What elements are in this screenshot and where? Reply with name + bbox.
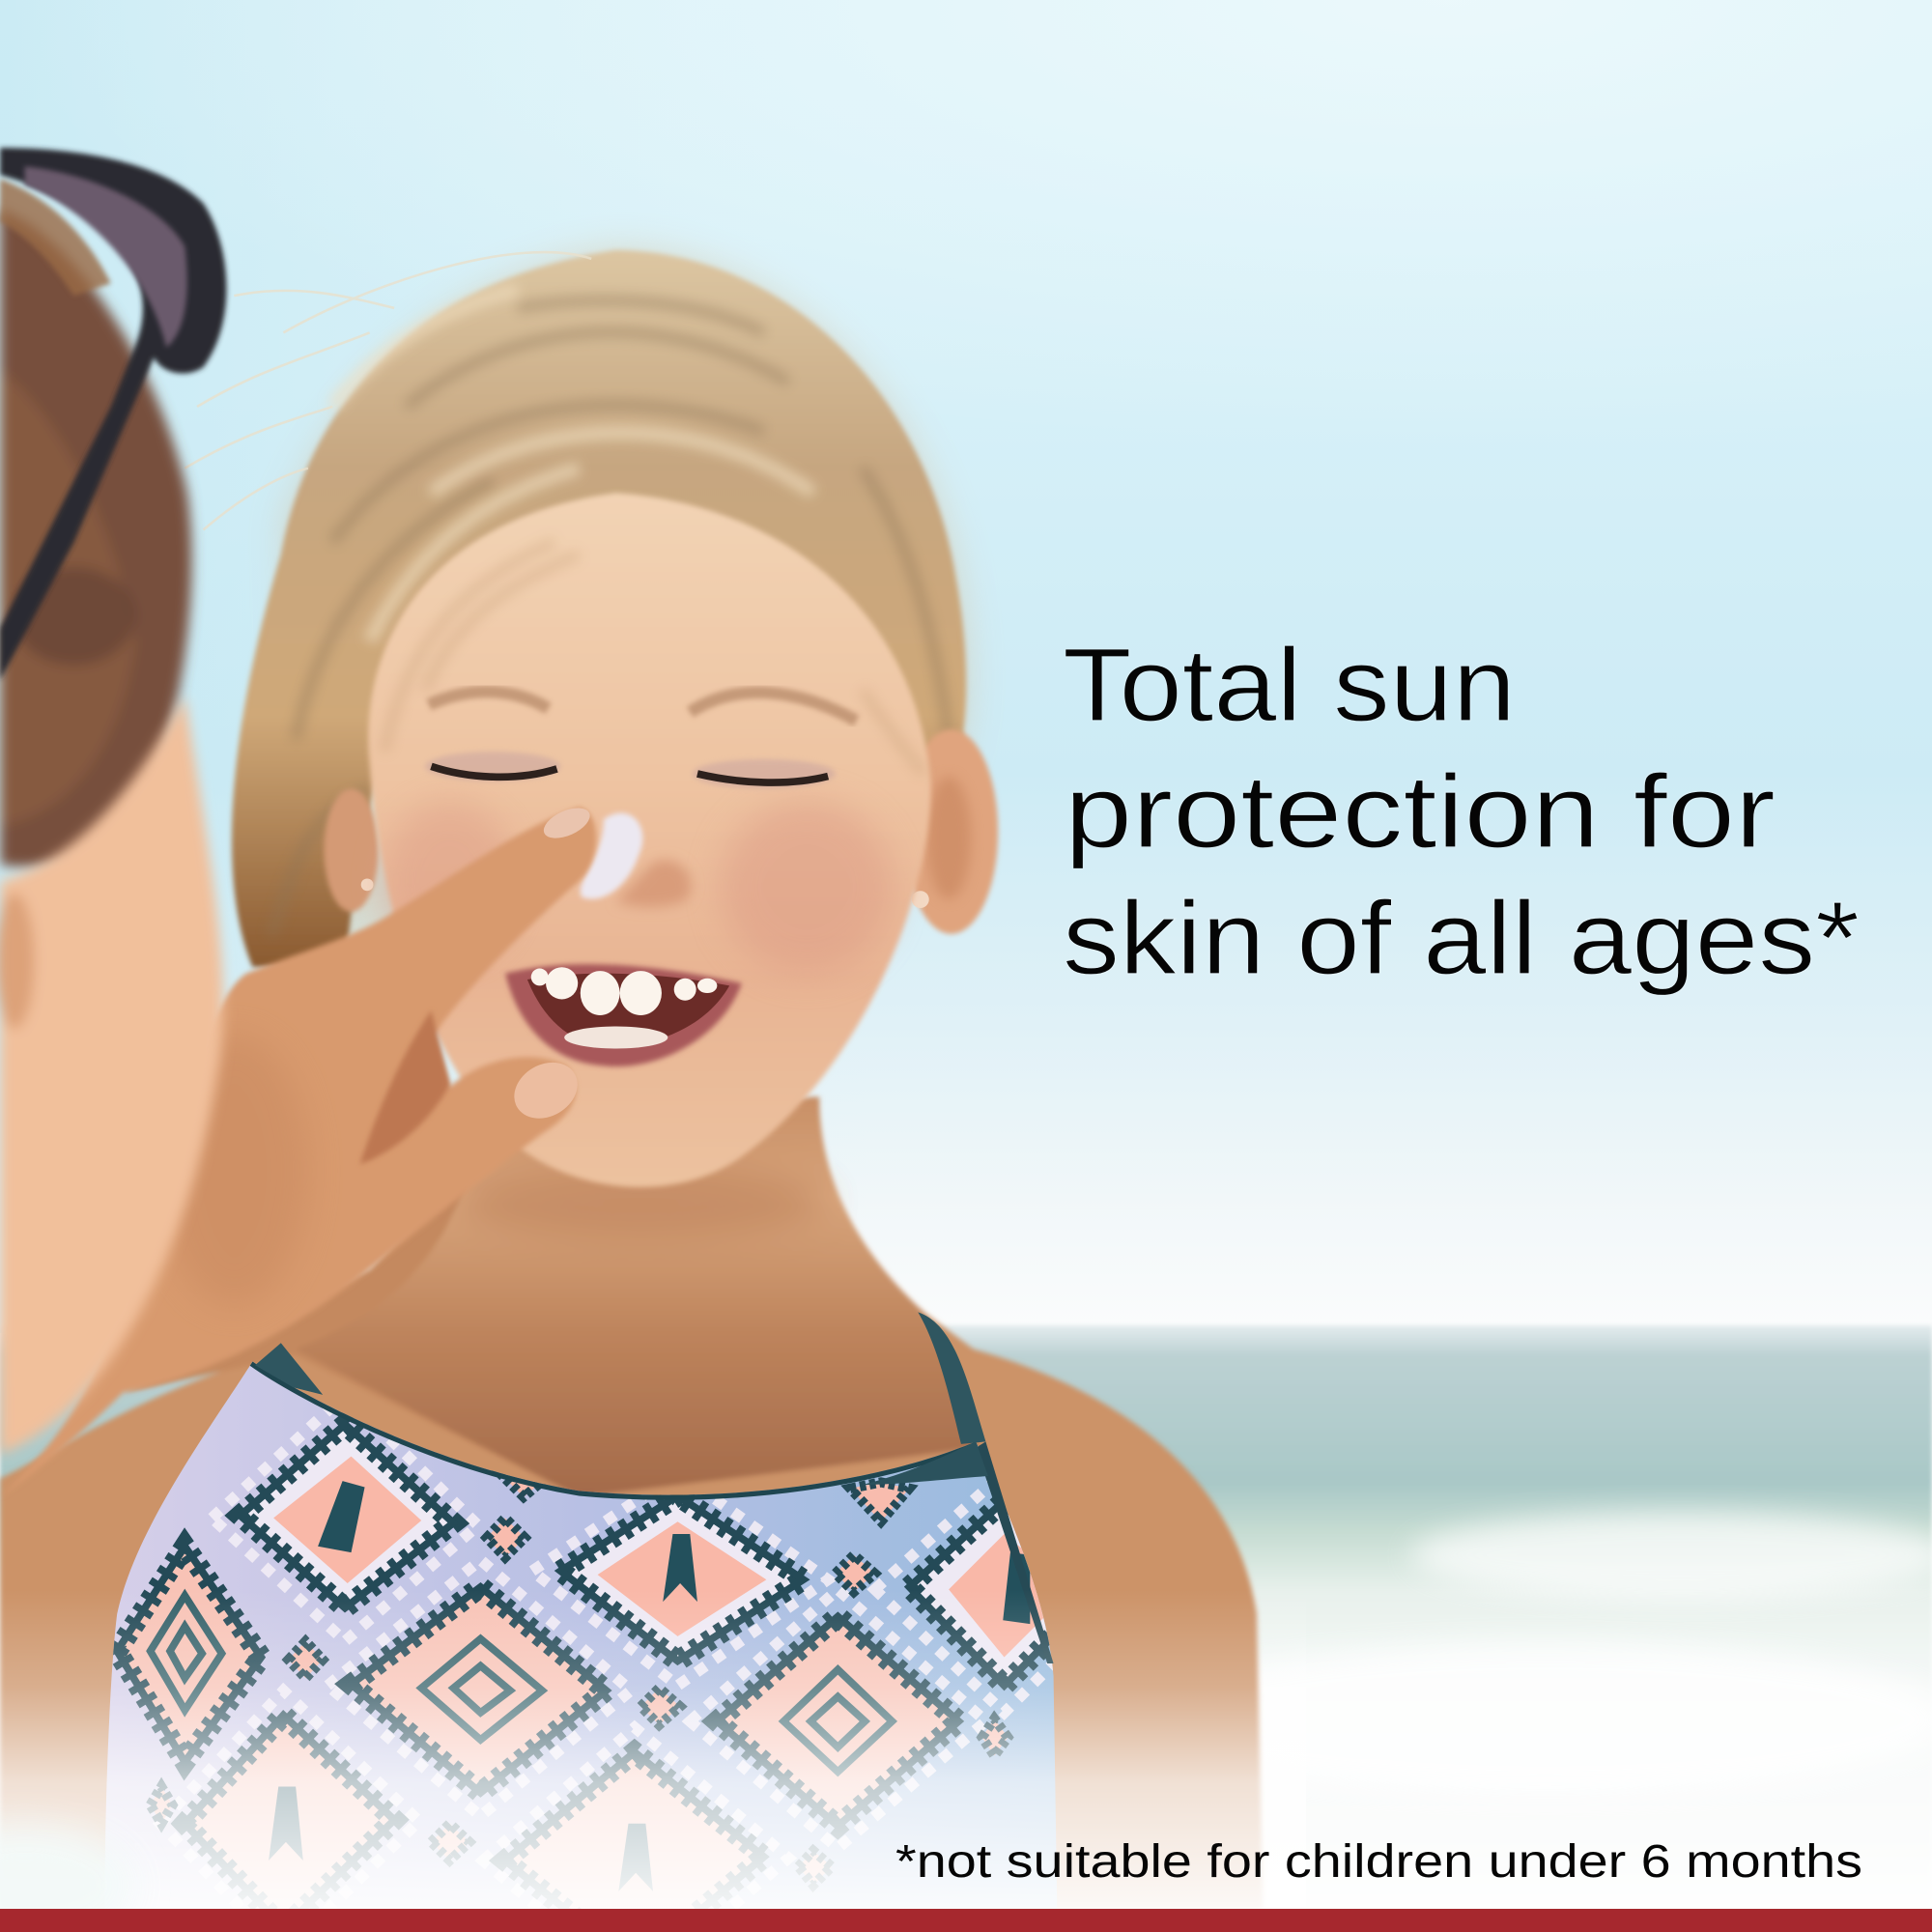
footnote: *not suitable for children under 6 months bbox=[895, 1836, 1862, 1888]
headline: skin of all ages* bbox=[1063, 879, 1860, 996]
headline: Total sun bbox=[1063, 626, 1516, 743]
mouth bbox=[505, 964, 742, 1066]
swimsuit centre arrows bbox=[269, 1481, 1030, 1891]
swimsuit small diamonds bbox=[151, 1460, 1008, 1886]
photo: child and adult applying sunscreen bbox=[0, 148, 1306, 1932]
sunglasses bbox=[0, 148, 226, 680]
child face bbox=[368, 493, 930, 1187]
headline bbox=[1063, 626, 1860, 996]
bottom red bar bbox=[0, 1909, 1932, 1932]
swimsuit checker band bbox=[187, 1405, 1053, 1866]
swimsuit large diamonds: teeth bbox=[117, 1424, 1099, 1932]
adult face bbox=[0, 696, 223, 1454]
child body skin bbox=[0, 1096, 1263, 1910]
child ears bbox=[324, 729, 998, 934]
swimsuit concentric rings bbox=[151, 1596, 892, 1772]
swimsuit inner pink diamonds bbox=[273, 1457, 1072, 1658]
adult shoulder highlight at bottom left bbox=[0, 1824, 135, 1932]
sunscreen on nose bbox=[581, 813, 642, 899]
adult hand bbox=[0, 802, 596, 1497]
swimsuit with diamond pattern bbox=[105, 1362, 1057, 1909]
swimsuit straps bbox=[255, 1312, 1054, 1663]
swimsuit large diamonds: solid outline bbox=[117, 1424, 1099, 1932]
bottom fade over photo bbox=[0, 1589, 1306, 1913]
adult hair bbox=[0, 210, 191, 867]
child hair bbox=[185, 246, 970, 967]
headline: protection for bbox=[1065, 753, 1776, 869]
